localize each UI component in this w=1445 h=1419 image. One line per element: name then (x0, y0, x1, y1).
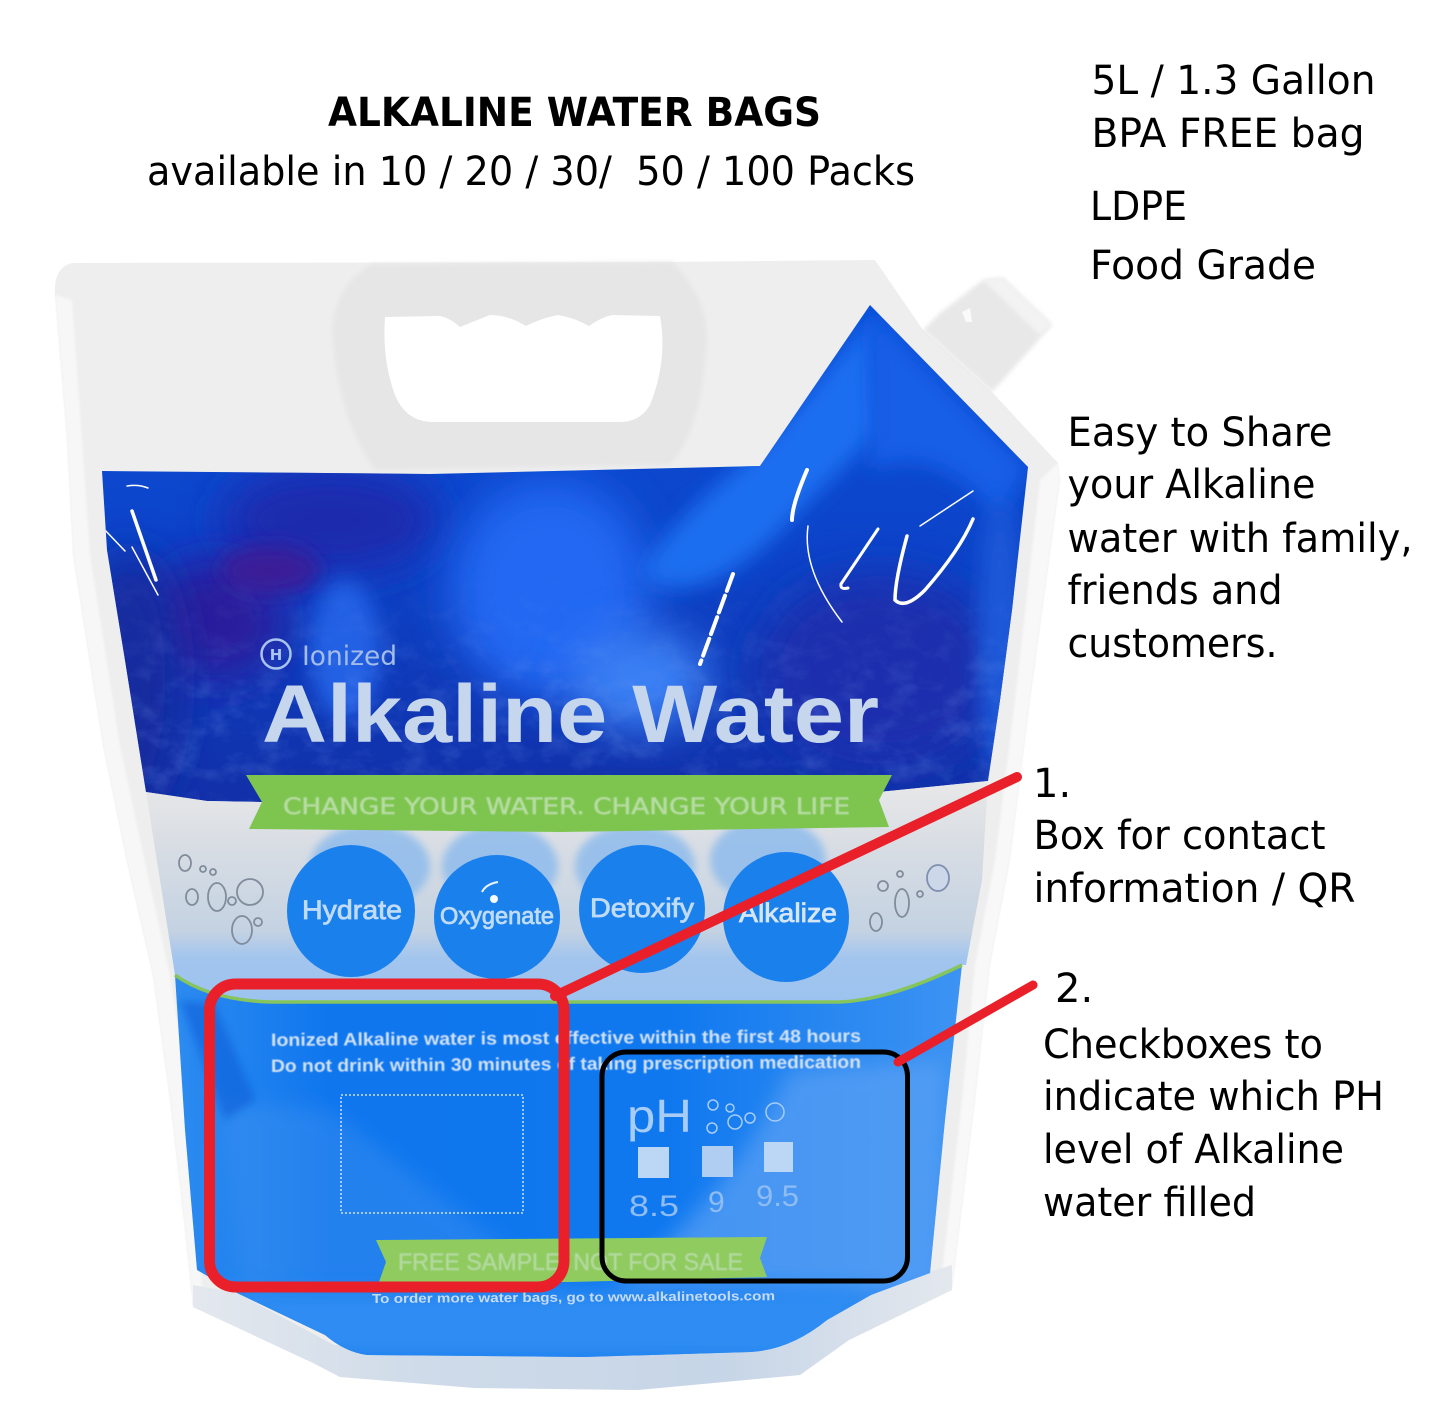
title: available in 10 / 20 / 30/ 50 / 100 Packs (147, 149, 915, 195)
panel text: usage note (271, 1026, 861, 1076)
text: callout 1: 1. (1033, 761, 1071, 807)
title (147, 90, 915, 195)
circle: detoxify (579, 845, 705, 973)
callout line 1 (555, 777, 1017, 996)
ph checkboxes (627, 1090, 799, 1223)
text: callout 2: indicate which PH (1043, 1074, 1384, 1120)
circle: oxygenate: Oxygenate (440, 903, 554, 930)
banner: slogan (246, 775, 892, 832)
bottom band (193, 1265, 952, 1390)
green curve line (175, 965, 962, 1002)
text: callout 2: Checkboxes to (1043, 1022, 1323, 1068)
text: easy to share (1068, 410, 1412, 667)
handle hole (384, 315, 662, 422)
top blue panel (80, 300, 1050, 820)
outer right soft edge (940, 463, 1060, 1290)
lower blue panel (170, 950, 970, 1370)
text: callout 1: information / QR (1034, 866, 1356, 912)
callout box 2: checkboxes highlight (602, 1052, 908, 1281)
bubbles left (179, 855, 263, 944)
logo: ionized: Ionized (302, 641, 397, 672)
bubbles right (870, 865, 949, 931)
transparent window (146, 781, 988, 1002)
circle: alkalize (723, 852, 849, 982)
logo: ionized: H (270, 646, 282, 664)
logo: ionized (262, 640, 397, 672)
banner: slogan: CHANGE YOUR WATER. CHANGE YOUR LIFE (283, 795, 850, 820)
water bag product illustration (55, 260, 1060, 1390)
heading on bag: Alkaline Water (262, 669, 879, 760)
benefit circles (287, 845, 849, 982)
text: easy to share: customers. (1068, 621, 1278, 667)
text: callout 2 (1043, 966, 1384, 1226)
spec text: Food Grade (1090, 243, 1316, 289)
circle: oxygenate (434, 855, 560, 979)
text: callout 2: level of Alkaline (1043, 1127, 1344, 1173)
outer left soft edge (55, 295, 203, 1307)
text: callout 2: water filled (1043, 1180, 1256, 1226)
text: easy to share: water with family, (1068, 516, 1412, 562)
banner: free sample: FREE SAMPLE, NOT FOR SALE (398, 1249, 743, 1276)
circle: alkalize: Alkalize (739, 898, 837, 928)
text: easy to share: your Alkaline (1068, 462, 1316, 508)
panel text: usage note: Do not drink within 30 minutes of taking prescription medication (271, 1052, 861, 1076)
callout line 2 (898, 985, 1033, 1062)
spout (923, 278, 1052, 392)
title: ALKALINE WATER BAGS (328, 90, 821, 136)
circle: hydrate (287, 845, 415, 977)
panel text: usage note: Ionized Alkaline water is most effective within the first 48 hours (271, 1026, 861, 1050)
handle (332, 262, 707, 470)
spec text: BPA FREE bag (1092, 111, 1364, 157)
circle: detoxify: Detoxify (590, 893, 695, 923)
text: callout 1: Box for contact (1034, 813, 1326, 859)
ph checkboxes: 8.5 (629, 1190, 679, 1223)
spec text: LDPE (1090, 184, 1187, 230)
text: easy to share: Easy to Share (1068, 410, 1332, 456)
ph checkboxes: 9 (708, 1186, 725, 1219)
callout box 1: contact box highlight (210, 984, 564, 1287)
bag body (55, 260, 1060, 1390)
text: callout 1 (1033, 761, 1356, 912)
text: callout 2: 2. (1055, 966, 1093, 1012)
spec text: 5L / 1.3 Gallon (1092, 58, 1376, 104)
circle: hydrate: Hydrate (302, 895, 402, 925)
glare highlights (103, 470, 973, 664)
order note: To order more water bags, go to www.alkalinetools.com (372, 1288, 775, 1306)
text: easy to share: friends and (1068, 568, 1282, 614)
banner: free sample (376, 1237, 767, 1282)
ph checkboxes: pH (627, 1090, 692, 1142)
spec text (1090, 58, 1376, 289)
ph checkboxes: 9.5 (756, 1180, 799, 1213)
dotted contact box (341, 1095, 523, 1213)
